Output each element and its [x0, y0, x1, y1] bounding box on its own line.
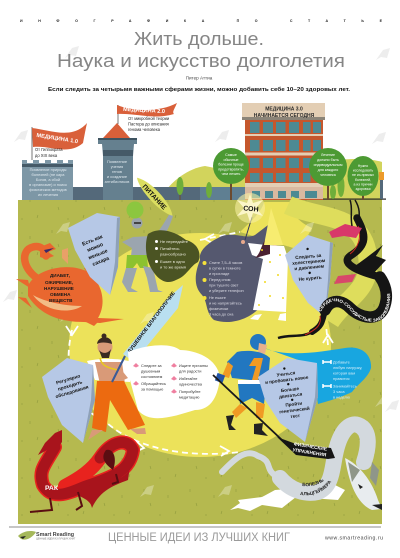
orange dragon: diabetes: ОБМЕНА	[50, 292, 71, 297]
castle tower: medicine 1.0: их лечения	[38, 192, 58, 197]
shield: exercise: и пробовать новое	[265, 374, 309, 385]
knight cape with tips: Не переедайте	[160, 239, 189, 244]
shield: checkups: Регулярно	[56, 373, 81, 386]
wizard cloud with sleep tips	[196, 225, 268, 322]
tree: personal medicine: индивидуальным	[314, 163, 343, 167]
tree: causes of health: а из причин	[354, 182, 373, 186]
banner: physical exercise: УПРАЖНЕНИЯ	[292, 447, 327, 459]
tree: causes of health: болезней,	[355, 178, 371, 182]
knight cape with tips: и то же время	[160, 264, 186, 270]
wizard cloud with sleep tips: и прохладе	[209, 271, 229, 276]
white cloud with wellbeing tips: Попробуйте	[179, 389, 201, 394]
knight cape with tips	[146, 230, 200, 282]
white cloud with wellbeing tips: одиночества	[179, 382, 203, 386]
white cloud with wellbeing tips: состоянием	[141, 374, 163, 379]
red dragon: cancer: РАК	[45, 485, 59, 492]
shield: checkups	[42, 358, 95, 443]
shield: heart health	[285, 235, 333, 317]
footer	[9, 526, 383, 544]
shield: exercise: тест	[290, 413, 301, 419]
wizard	[241, 208, 288, 321]
white cloud with wellbeing tips: за помощью	[141, 386, 163, 392]
wizard cloud with sleep tips: в сутки в темноте	[209, 266, 241, 270]
shield: heart health: Не курить	[298, 275, 322, 282]
castle tower: medicine 1.0: физических методов	[29, 187, 67, 192]
orange dragon: diabetes: НАРУШЕНИЕ	[44, 286, 74, 291]
shield: heart health: холестерином	[292, 258, 326, 266]
hockey player	[213, 334, 282, 440]
shield: nutrition: Есть как	[81, 234, 104, 248]
castle tower: medicine 1.0	[22, 160, 73, 200]
tree: prevention: обычные	[223, 158, 239, 162]
flag: medicine 2.0	[117, 103, 177, 124]
castle tower: medicine 2.0: и создание	[107, 174, 127, 179]
tree: causes of health: исследовать	[353, 169, 373, 173]
tree: prevention: предотвратить,	[218, 167, 244, 171]
banner: nutrition: ПИТАНИЕ	[141, 183, 168, 212]
knight cape with tips: Ешьте в одно	[160, 259, 186, 264]
monk	[87, 334, 146, 440]
orange dragon: diabetes: ВЕЩЕСТВ	[49, 298, 73, 303]
wizard cloud with sleep tips: Перед сном	[209, 277, 231, 282]
hockey player cape with tips: Занимайтесь	[333, 384, 357, 388]
orange dragon: diabetes	[16, 243, 124, 326]
building: medicine 3.0: НАЧИНАЕТСЯ СЕГОДНЯ	[254, 113, 315, 119]
shield: exercise: Больше	[281, 386, 300, 393]
black dragon: cardiovascular disease	[278, 200, 392, 340]
shield: nutrition: можно	[86, 242, 104, 254]
flag: medicine 2.0: МЕДИЦИНА 2.0	[123, 107, 165, 115]
title: Наука и искусство долголетия	[57, 50, 345, 71]
tree: personal medicine: для каждого	[318, 168, 338, 172]
white-grey dragon: Alzheimer's disease	[219, 416, 382, 511]
white-grey dragon: Alzheimer's disease: БОЛЕЗНЬ	[302, 479, 324, 486]
building: medicine 3.0	[242, 103, 325, 200]
white cloud with wellbeing tips	[128, 345, 220, 418]
star: sleep	[235, 193, 265, 223]
castle tower: medicine 2.0	[98, 123, 137, 200]
footer: ЦЕННЫЕ ИДЕИ ИЗ ЛУЧШИХ КНИГ	[36, 538, 76, 540]
shield: heart health: и давлением	[294, 264, 325, 271]
caption: medicine 2.0: Пастера до описания	[128, 122, 169, 126]
shield: exercise	[258, 358, 318, 442]
tree: personal medicine: человека	[320, 173, 336, 177]
tree: causes of health: здоровья	[356, 187, 371, 191]
title: Жить дольше.	[134, 28, 264, 49]
shield: checkups: проходить	[58, 380, 83, 393]
castle tower: medicine 1.0: болезней (не кара	[32, 172, 65, 177]
wizard cloud with sleep tips: Спите 7,5–8 часов	[209, 260, 242, 265]
orange dragon: diabetes: ОЖИРЕНИЕ,	[45, 280, 73, 285]
tree: prevention: Самые	[225, 153, 237, 157]
wizard cloud with sleep tips: физически	[209, 306, 228, 311]
green field with yellow path	[18, 200, 389, 524]
white cloud with wellbeing tips: Следите за	[141, 363, 162, 368]
tree: prevention	[213, 148, 249, 200]
castle tower: medicine 2.0: генов	[112, 169, 122, 174]
wizard cloud with sleep tips: при тушите свет	[209, 282, 239, 288]
white cloud with wellbeing tips: медитацию	[179, 394, 199, 400]
shield: nutrition	[68, 213, 120, 295]
tree: causes of health	[348, 156, 378, 200]
castle tower: medicine 2.0: Появление	[107, 159, 127, 164]
castle tower: medicine 2.0: антибиотиков	[105, 179, 129, 184]
shield: heart health: Следить за	[295, 253, 322, 260]
banner: physical exercise: ФИЗИЧЕСКИЕ	[293, 441, 328, 453]
title	[57, 28, 345, 71]
footer: www.smartreading.ru	[325, 536, 383, 542]
sword: spiritual health: ДУШЕВНОЕ БЛАГОПОЛУЧИЕ	[127, 290, 177, 354]
author: Питер Аттиа	[186, 76, 213, 80]
footer: Smart Reading	[36, 532, 74, 538]
banner: physical exercise	[277, 437, 335, 459]
hockey player cape with tips: Добавьте	[333, 360, 350, 364]
landscape: hills and wall	[72, 159, 386, 200]
castle tower: medicine 1.0: Богов, а сбой	[36, 177, 60, 182]
flag: medicine 1.0	[32, 123, 87, 160]
sword: spiritual health	[123, 285, 183, 362]
shield: exercise: генетический	[279, 405, 310, 414]
castle tower: medicine 2.0: учения	[111, 164, 123, 169]
flag: medicine 1.0: МЕДИЦИНА 1.0	[36, 133, 78, 145]
header label: ИНФОГРАФИКА ПО СТАТЬЕ	[20, 19, 383, 23]
tree: prevention: чем лечить	[222, 172, 240, 176]
black dragon: cardiovascular disease: СЕРДЕЧНО-СОСУДИСТЫЕ ЗАБОЛЕВАНИЯ	[319, 294, 390, 322]
banner: nutrition	[133, 174, 177, 219]
wizard cloud with sleep tips: 3 часа до сна	[209, 312, 234, 316]
shield: checkups: обследования	[55, 383, 90, 400]
hockey player cape with tips	[262, 347, 371, 404]
hockey player cape with tips: нравится	[333, 376, 350, 381]
white-grey dragon: Alzheimer's disease: АЛЬЦГЕЙМЕРА	[300, 480, 332, 496]
star: sleep: СОН	[243, 205, 259, 214]
hockey player cape with tips: любую нагрузку,	[333, 365, 362, 370]
caption: medicine 1.0: до XIX века	[35, 153, 58, 158]
white cloud with wellbeing tips: Обращайтесь	[141, 381, 166, 386]
knight: nutrition	[122, 202, 173, 292]
tree: causes of health: не из-прямых	[352, 173, 374, 177]
shield: exercise: двигаться	[279, 392, 303, 399]
tree: causes of health: Нужно	[358, 164, 368, 168]
hockey player cape with tips: в неделю	[333, 394, 350, 400]
knight cape with tips: разнообразно	[160, 252, 187, 256]
shield: exercise: Учиться	[276, 370, 296, 377]
tree: prevention: болезни проще	[218, 163, 244, 167]
tree: personal medicine: должно быть	[317, 158, 339, 162]
castle tower: medicine 1.0: в организме) и поиск	[29, 182, 67, 187]
subtitle: Если следить за четырьмя важными сферами жизни, можно добавить себе 10–20 здоровых лет.	[48, 86, 350, 93]
tree: personal medicine	[309, 148, 347, 200]
white cloud with wellbeing tips: Избегайте	[179, 376, 197, 381]
orange dragon: diabetes: ДИАБЕТ,	[50, 273, 70, 278]
white cloud with wellbeing tips: Ищите причины	[179, 363, 208, 368]
red dragon: cancer	[30, 430, 133, 512]
caption: medicine 2.0: От микробной теории	[128, 116, 169, 121]
shield: nutrition: сахара	[92, 256, 110, 268]
footer: ЦЕННЫЕ ИДЕИ ИЗ ЛУЧШИХ КНИГ	[108, 532, 291, 544]
wizard cloud with sleep tips: и не напрягайтесь	[209, 300, 242, 306]
caption: medicine 1.0: От Гиппократа	[35, 147, 63, 152]
hockey player cape with tips: которая вам	[333, 370, 355, 376]
castle tower: medicine 1.0: Появление природы	[30, 167, 67, 172]
white cloud with wellbeing tips: душевным	[141, 368, 161, 374]
wizard cloud with sleep tips: и уберите телефон	[209, 288, 244, 293]
tree: personal medicine: Лечение	[321, 153, 335, 157]
white cloud with wellbeing tips: для радости	[179, 368, 201, 374]
building: medicine 3.0: МЕДИЦИНА 3.0	[265, 106, 303, 112]
hockey player cape with tips: 3 часа	[333, 389, 345, 394]
shield: nutrition: меньше	[88, 248, 109, 261]
shield: exercise: Пройти	[285, 400, 303, 408]
knight cape with tips: Питайтесь	[160, 246, 179, 251]
wizard cloud with sleep tips: Не ешьте	[209, 295, 226, 300]
caption: medicine 2.0: генома человека	[128, 127, 161, 132]
